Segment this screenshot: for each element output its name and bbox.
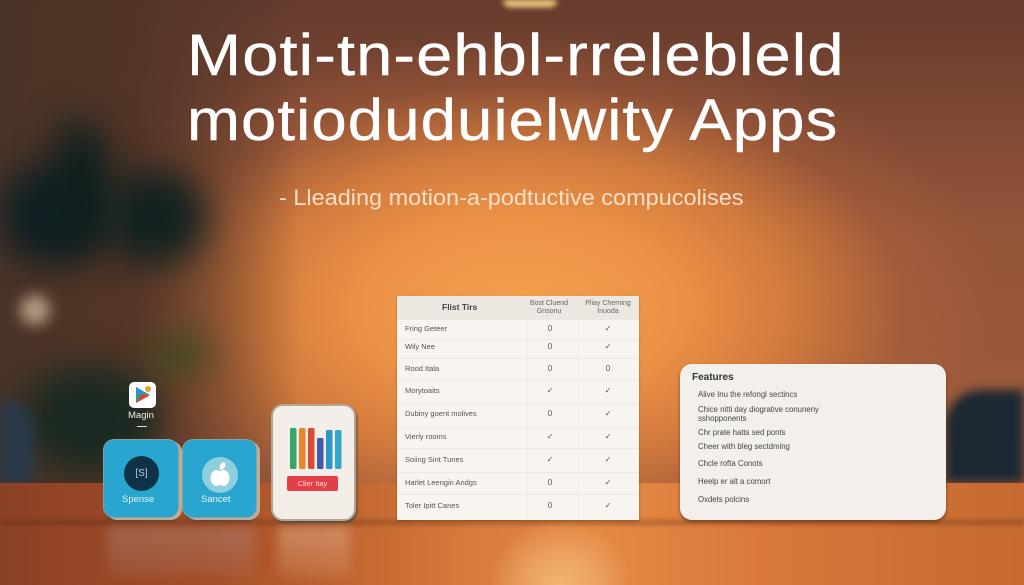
table rows: ✓ bbox=[605, 432, 611, 441]
features list: Chr prate hatts sed ponts bbox=[698, 428, 786, 437]
features list: Heelp er alt a comort bbox=[698, 477, 770, 486]
table rows: ✓ bbox=[605, 409, 611, 418]
table rows: Wily Nee bbox=[405, 342, 435, 351]
app tile: bar chart card bbox=[271, 404, 356, 521]
table header: Inuoda bbox=[597, 308, 619, 314]
features heading: Features bbox=[692, 372, 734, 383]
table header: Gnsonu bbox=[537, 308, 561, 314]
table rows: ✓ bbox=[605, 342, 611, 351]
table rows: ✓ bbox=[547, 386, 553, 395]
table header: Flist Tirs bbox=[442, 302, 477, 312]
panel: features card bbox=[680, 364, 946, 520]
table rows: ✓ bbox=[605, 324, 611, 333]
tile reflections bbox=[108, 527, 254, 577]
icon: play store app with label bbox=[128, 382, 156, 427]
table rows: ✓ bbox=[547, 432, 553, 441]
features list bbox=[698, 390, 819, 504]
table rows: 0 bbox=[548, 501, 552, 510]
app tile: Spense bbox=[104, 440, 178, 517]
table rows: Dubiny goent molives bbox=[405, 409, 477, 418]
tile label: Sancet bbox=[201, 494, 231, 505]
title bbox=[187, 23, 845, 153]
icon: apple circle bbox=[202, 457, 238, 493]
table rows: ✓ bbox=[547, 455, 553, 464]
table rows: Vierly rooms bbox=[405, 432, 447, 441]
features list: Chcle rofta Conots bbox=[698, 459, 763, 468]
table rows: Morytoaits bbox=[405, 386, 440, 395]
panel: comparison table bbox=[397, 296, 639, 520]
table header bbox=[397, 296, 639, 320]
table rows: Harlet Leengin Andgs bbox=[405, 478, 477, 487]
icon: dark circle bbox=[124, 456, 159, 491]
table rows: 0 bbox=[548, 364, 552, 373]
app tile: Sancet bbox=[183, 440, 256, 517]
table rows: 0 bbox=[548, 342, 552, 351]
tile label: Spense bbox=[122, 494, 154, 505]
table rows: 0 bbox=[548, 409, 552, 418]
title: motioduduielwity Apps bbox=[187, 88, 838, 153]
features list: Oxdets polcins bbox=[698, 495, 749, 504]
features list: Alive Inu the refongl sectincs bbox=[698, 390, 797, 399]
table rows: Toler Ipitt Canes bbox=[405, 501, 459, 510]
app label: Magin bbox=[128, 410, 154, 421]
table rows: Soiing Sint Tunes bbox=[405, 455, 463, 464]
table rows: 0 bbox=[606, 364, 610, 373]
features list: sshopponents bbox=[698, 414, 747, 423]
table rows: ✓ bbox=[605, 478, 611, 487]
table header: Pliay Cherning bbox=[585, 300, 631, 307]
features list: Chice nitti day diogrative conuneny bbox=[698, 405, 819, 414]
red button: Clier Itay bbox=[298, 479, 327, 488]
features list: Cheer with bleg sectdming bbox=[698, 442, 790, 451]
title: Moti-tn-ehbl-rrelebleld bbox=[187, 23, 845, 88]
red button bbox=[287, 476, 338, 491]
icon: play triangle bbox=[129, 382, 156, 408]
table rows: Rood Itala bbox=[405, 364, 439, 373]
table rows: 0 bbox=[548, 324, 552, 333]
table rows: ✓ bbox=[605, 455, 611, 464]
wooden table surface bbox=[0, 483, 1024, 585]
table header: Bost Cluend bbox=[530, 300, 568, 307]
table rows: ✓ bbox=[605, 386, 611, 395]
table rows bbox=[397, 320, 639, 520]
table rows: ✓ bbox=[605, 501, 611, 510]
table rows: Fring Geteer bbox=[405, 324, 447, 333]
icon: dark circle: [S] bbox=[135, 468, 148, 479]
table rows: 0 bbox=[548, 478, 552, 487]
subtitle: - Lleading motion-a-podtuctive compucolises bbox=[279, 185, 744, 210]
bar chart bbox=[290, 428, 342, 469]
